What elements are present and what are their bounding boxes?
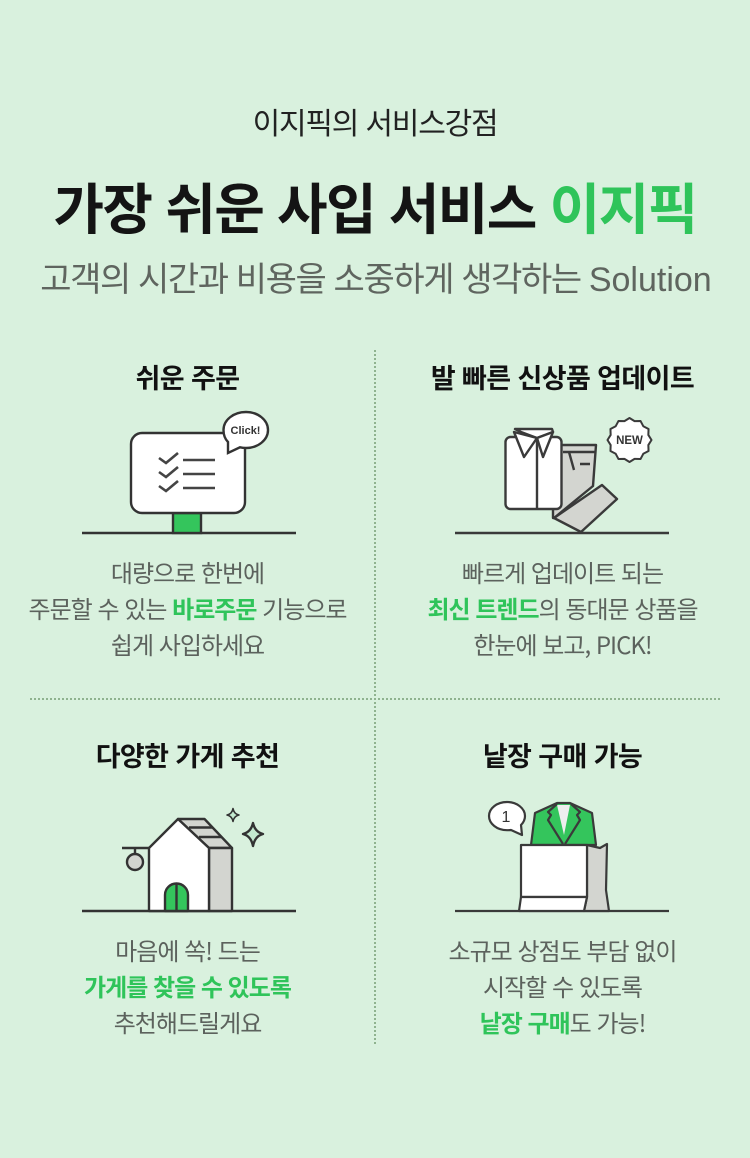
panel: new arrivals text: 한눈에 보고, PICK!: [473, 626, 652, 661]
icon: new badge: NEW: [616, 435, 643, 447]
panel: store recommendation text: 가게를 찾을 수 있도록: [84, 968, 291, 1003]
panel: store recommendation heading: 다양한 가게 추천: [96, 735, 279, 774]
eyebrow heading: 이지픽의 서비스강점: [253, 99, 497, 143]
icon: shirt and trousers: [455, 429, 669, 533]
panel: easy order heading: 쉬운 주문: [136, 357, 239, 396]
panel: store recommendation text: [84, 932, 291, 1039]
panel: new arrivals text: 빠르게 업데이트 되는: [462, 554, 663, 589]
panel: new arrivals text: [427, 554, 698, 661]
panel: new arrivals text: 최신 트렌드의 동대문 상품을: [427, 590, 698, 625]
panel: easy order text: 주문할 수 있는 바로주문 기능으로: [28, 590, 346, 625]
panel: store recommendation text: 추천해드릴게요: [114, 1004, 261, 1039]
panel: new arrivals heading: 발 빠른 신상품 업데이트: [431, 357, 694, 396]
panel: store recommendation text: 마음에 쏙! 드는: [115, 932, 260, 967]
icon: shop house: [82, 808, 296, 911]
panel: single piece purchase heading: 낱장 구매 가능: [483, 735, 642, 774]
panel: single piece purchase text: 낱장 구매도 가능!: [480, 1004, 645, 1039]
panel: single piece purchase text: 소규모 상점도 부담 없이: [449, 932, 676, 967]
panel: easy order text: [28, 554, 346, 661]
main title: 가장 쉬운 사입 서비스 이지픽: [53, 165, 697, 245]
icon: order checklist board: [82, 412, 296, 533]
panel: single piece purchase text: 시작할 수 있도록: [483, 968, 642, 1003]
subtitle: 고객의 시간과 비용을 소중하게 생각하는 Solution: [40, 252, 712, 301]
panel: easy order text: 쉽게 사입하세요: [111, 626, 264, 661]
icon: new badge: [608, 418, 652, 462]
panel: single piece purchase text: [449, 932, 676, 1039]
icon: order checklist board: Click!: [231, 425, 260, 437]
icon: shopping bag with jacket: [455, 802, 669, 911]
icon: shopping bag with jacket: 1: [502, 809, 511, 826]
panel: easy order text: 대량으로 한번에: [111, 554, 264, 589]
